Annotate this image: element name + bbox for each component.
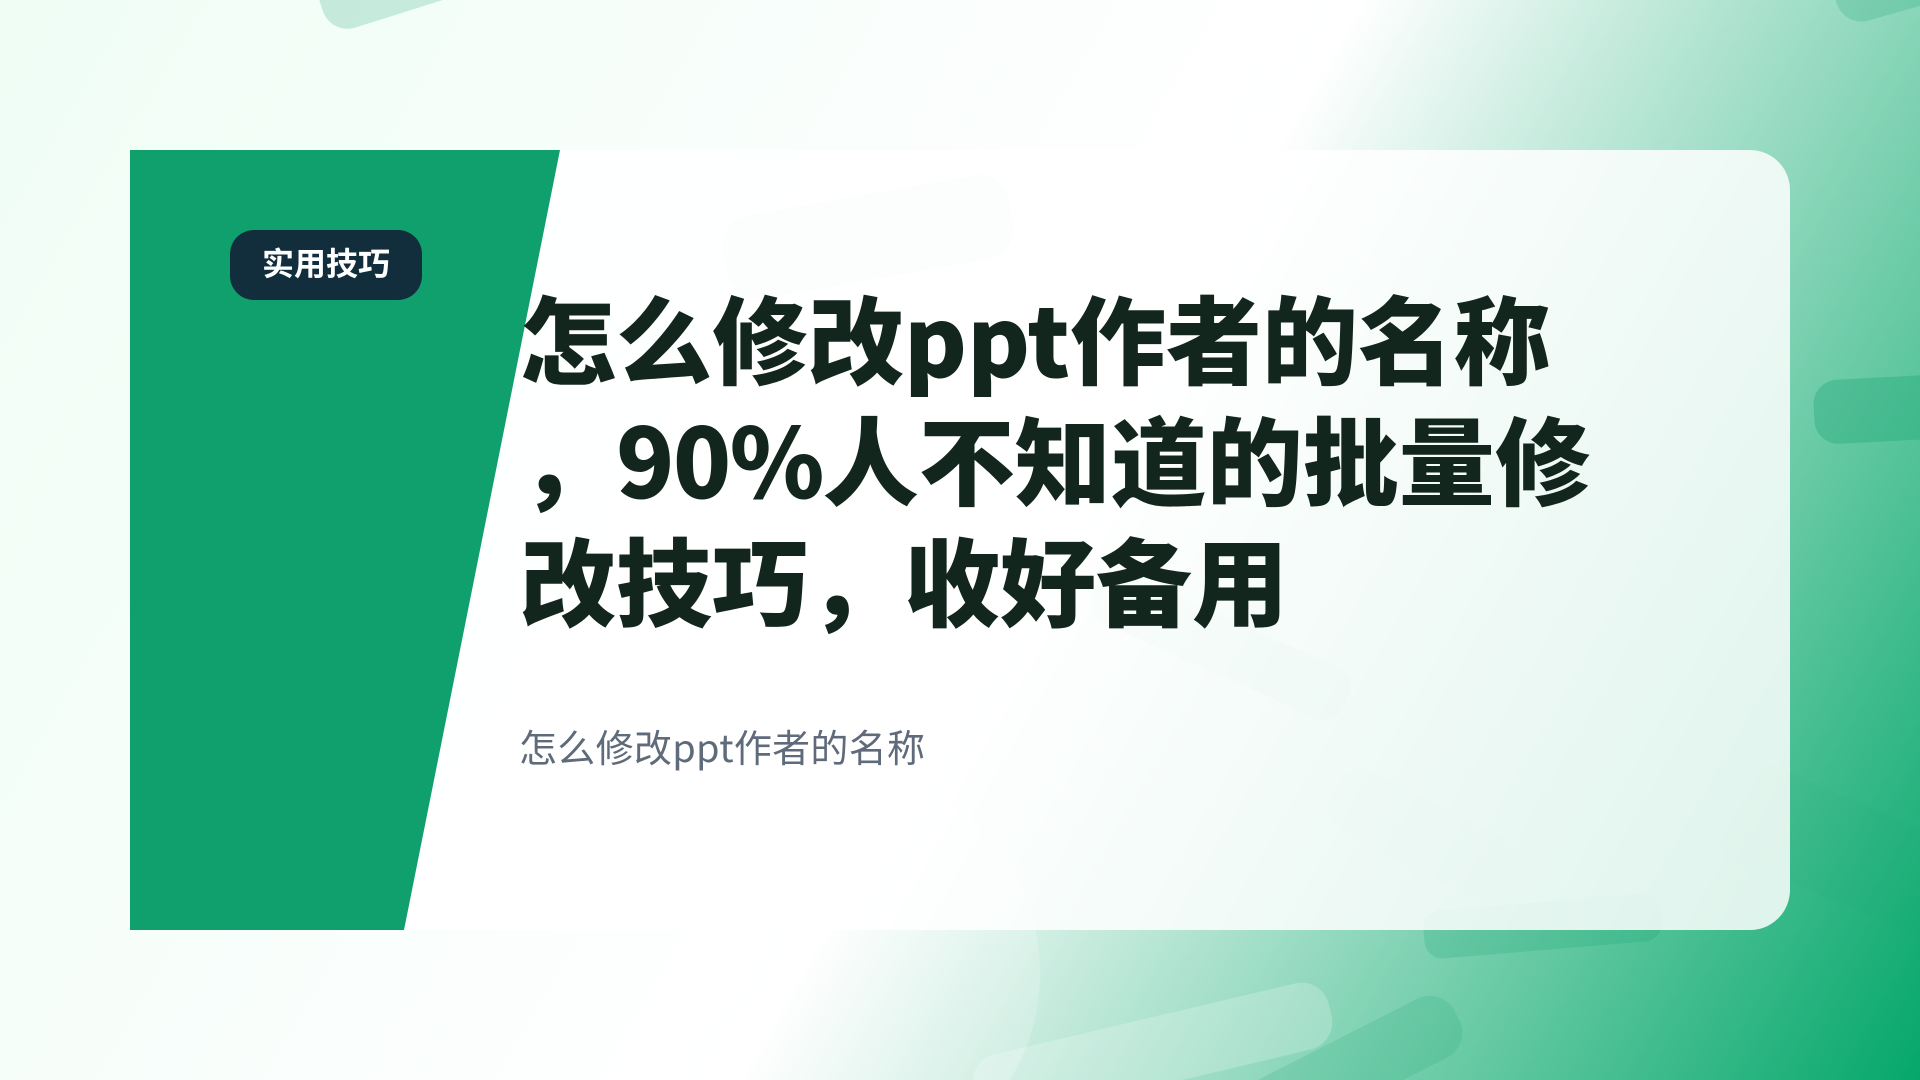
title: 怎么修改ppt作者的名称	[520, 266, 1550, 405]
panel: card	[130, 150, 1790, 930]
bar: card middle	[1084, 564, 1358, 727]
bar: bottom green	[1237, 986, 1472, 1080]
bar: card top	[718, 170, 1018, 304]
badge	[230, 230, 422, 300]
bar: card lower middle	[1320, 761, 1519, 906]
circle: bottom pale	[628, 767, 1040, 1080]
subtitle: 怎么修改ppt作者的名称	[519, 718, 925, 773]
bar: lower right edge	[1705, 754, 1920, 971]
bar: top right	[1824, 0, 1920, 28]
bar: card lower right	[1422, 892, 1663, 960]
title	[520, 266, 1591, 647]
badge: 实用技巧	[262, 239, 390, 285]
title: ，90%人不知道的批量修	[520, 387, 1591, 526]
bar: bottom white	[967, 977, 1338, 1080]
panel: green slanted block	[130, 150, 560, 930]
title: 改技巧，收好备用	[520, 508, 1288, 647]
bar: top left	[309, 0, 617, 35]
bar: right	[1812, 365, 1920, 445]
